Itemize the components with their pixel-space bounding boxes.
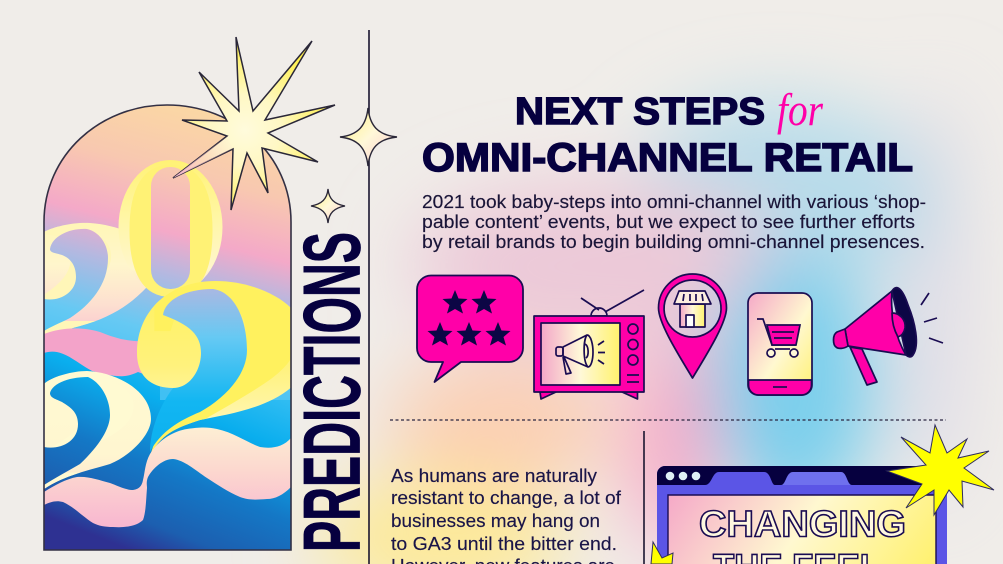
icon: yellow starburst top right — [887, 425, 994, 515]
icon: review speech bubble — [417, 276, 523, 382]
numeral: 0: 0 — [122, 121, 220, 338]
window heading line 1: CHANGING — [699, 504, 906, 544]
pink wave — [44, 328, 145, 376]
vertical title: PREDICTIONS: PREDICTIONS — [288, 232, 378, 552]
arch outline — [44, 105, 291, 550]
body line 4: to GA3 until the bitter end. — [391, 534, 617, 554]
browser tabs — [705, 472, 775, 485]
body line 3: businesses may hang on — [391, 511, 600, 531]
tv screen — [541, 323, 620, 385]
numeral: bottom 2 mass — [44, 371, 151, 489]
numeral: large 2: 2 — [130, 225, 320, 522]
icon: television — [534, 290, 644, 399]
phone base — [748, 380, 812, 395]
background colour wash — [315, 90, 965, 564]
window content — [668, 495, 936, 564]
numeral: large 2 mass — [137, 281, 295, 456]
icon: large megaphone — [834, 288, 943, 385]
tv body — [534, 316, 644, 392]
panel: 2022 arch artwork — [43, 104, 292, 551]
intro text block — [422, 192, 926, 252]
deep blue sea — [44, 352, 291, 550]
vertical rule right — [643, 431, 645, 564]
knobs — [627, 324, 639, 382]
shop — [674, 291, 711, 327]
heading line 1: NEXT STEPS — [515, 91, 765, 133]
icon: small sparkle — [311, 189, 345, 223]
first 2 inner space — [44, 229, 108, 331]
intro line 1: 2021 took baby-steps into omni-channel with various ‘shop- — [422, 192, 926, 212]
handle — [850, 347, 877, 385]
2022 numerals and waves — [44, 160, 290, 550]
body text block — [391, 466, 622, 564]
icon: phone with cart — [748, 293, 812, 395]
horn — [845, 291, 906, 355]
body line 2: resistant to change, a lot of — [391, 488, 622, 508]
bottom 2 inner space — [44, 377, 110, 485]
intro line 2: pable content’ events, but we expect to see further efforts — [422, 212, 915, 232]
star rating — [428, 290, 510, 346]
icon: yellow starburst bottom left — [651, 542, 673, 564]
vertical rule left — [368, 30, 370, 564]
heading — [422, 84, 913, 180]
body line 1: As humans are naturally — [391, 466, 597, 486]
feet — [540, 392, 638, 399]
large 2 inner space — [150, 289, 247, 452]
dotted divider — [390, 419, 946, 421]
intro line 3: by retail brands to begin building omni-channel presences. — [422, 232, 925, 252]
panel: browser window — [651, 425, 994, 564]
numeral: first 2 mass — [44, 222, 146, 328]
heading accent: for: for — [777, 84, 824, 135]
icon: location pin with shop — [658, 274, 726, 378]
numeral: 0 mass — [118, 160, 222, 280]
flowing cream wave — [44, 428, 291, 527]
icon: large starburst — [173, 37, 335, 210]
0 inner space — [151, 167, 190, 289]
mouth — [892, 288, 916, 357]
icon: sparkle on rule — [340, 108, 397, 166]
window dots — [666, 472, 700, 480]
window frame — [657, 466, 947, 564]
arch gradient background — [44, 105, 291, 550]
tv megaphone — [556, 335, 605, 374]
sound lines — [921, 293, 943, 343]
heading line 2: OMNI-CHANNEL RETAIL — [422, 136, 913, 180]
shopping cart — [757, 319, 800, 357]
antenna — [581, 290, 644, 316]
window top bar — [657, 466, 947, 485]
mouthpiece — [834, 329, 848, 348]
